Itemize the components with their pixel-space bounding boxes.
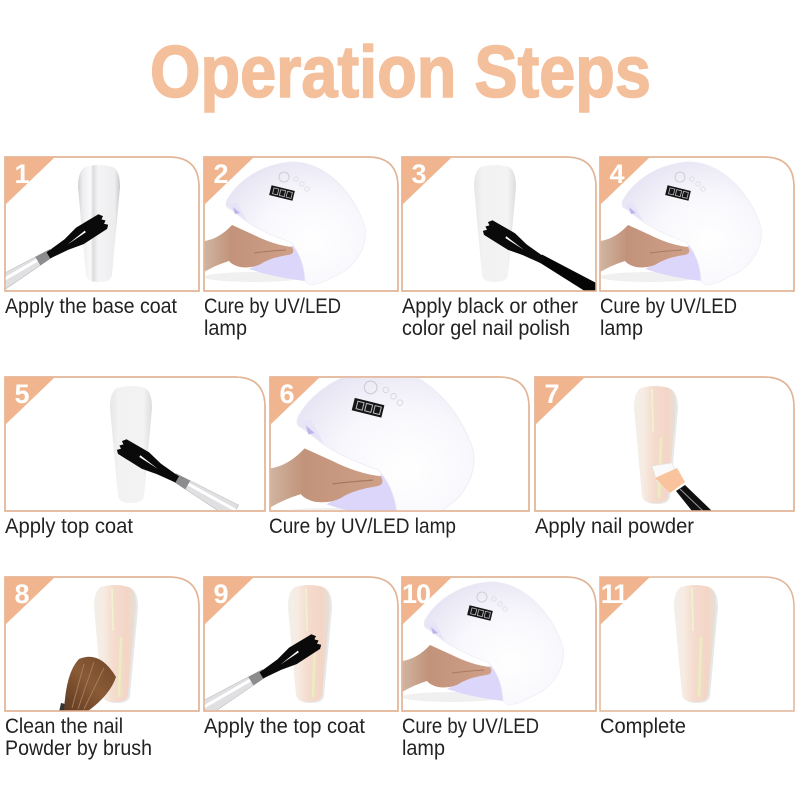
caption 1: Apply the base coat [5, 295, 177, 318]
caption 3: color gel nail polish [402, 317, 570, 340]
number badge 10 [402, 577, 452, 625]
icon: clear nail tip [78, 165, 120, 282]
caption 8: Powder by brush [5, 737, 152, 760]
panel: step 9 [200, 577, 398, 738]
number badge 2: 2 [213, 159, 229, 189]
icon: pearl nail [634, 386, 678, 504]
panel: step 11 [600, 577, 794, 738]
number badge 11: 11 [601, 579, 628, 609]
number badge 9: 9 [213, 579, 229, 609]
caption 7: Apply nail powder [535, 515, 694, 538]
caption 11: Complete [600, 715, 686, 738]
number badge 5 [5, 377, 55, 425]
number badge 1 [5, 157, 55, 205]
number badge 6 [270, 377, 320, 425]
number badge 5: 5 [14, 379, 30, 409]
number badge 9 [204, 577, 254, 625]
caption 3: Apply black or other [402, 295, 578, 318]
icon: finished pearl nail [674, 585, 718, 703]
panel: step 3 [402, 157, 609, 340]
panel: step 8 [5, 577, 199, 760]
number badge 7: 7 [544, 379, 560, 409]
number badge 2 [204, 157, 254, 205]
icon: black handle brush [482, 220, 596, 290]
icon: clear handle brush [6, 214, 108, 290]
panel: step 4 [600, 157, 794, 340]
panel: step 6 [269, 368, 529, 538]
number badge 3 [402, 157, 452, 205]
icon: clear handle brush [204, 634, 322, 710]
number badge 4: 4 [609, 159, 625, 189]
panel: step 1 [0, 157, 199, 318]
icon: fan brush [59, 657, 116, 712]
icon: UV/LED lamp with hand [204, 162, 365, 285]
caption 8: Clean the nail [5, 715, 123, 738]
icon: white nail tip [474, 165, 516, 282]
icon: pearl nail [288, 585, 332, 703]
number badge 1: 1 [14, 159, 30, 189]
number badge 3: 3 [411, 159, 427, 189]
panel: step 10 [402, 577, 596, 760]
number badge 6: 6 [279, 379, 295, 409]
caption 4: lamp [600, 317, 643, 340]
icon: enlarged UV/LED lamp with hand [270, 378, 474, 510]
icon: clear handle brush [116, 439, 239, 510]
caption 2: lamp [204, 317, 247, 340]
caption 9: Apply the top coat [204, 715, 365, 738]
panel: step 5 [5, 377, 265, 538]
caption 4: Cure by UV/LED [600, 295, 737, 318]
icon: pearl nail [94, 585, 138, 703]
number badge 8: 8 [14, 579, 30, 609]
panel: step 2 [204, 157, 398, 340]
caption 10: lamp [402, 737, 445, 760]
icon: UV/LED lamp with hand [402, 582, 563, 705]
title: Operation Steps [150, 32, 651, 113]
icon: powder sponge applicator [652, 463, 712, 511]
number badge 10: 10 [402, 579, 430, 609]
number badge 7 [535, 377, 585, 425]
caption 5: Apply top coat [5, 515, 133, 538]
caption 10: Cure by UV/LED [402, 715, 539, 738]
caption 6: Cure by UV/LED lamp [269, 515, 456, 538]
icon: UV/LED lamp with hand [600, 162, 761, 285]
caption 2: Cure by UV/LED [204, 295, 341, 318]
number badge 11 [600, 577, 650, 625]
icon: white nail tip [110, 386, 152, 503]
number badge 8 [5, 577, 55, 625]
number badge 4 [600, 157, 650, 205]
panel: step 7 [535, 377, 794, 538]
